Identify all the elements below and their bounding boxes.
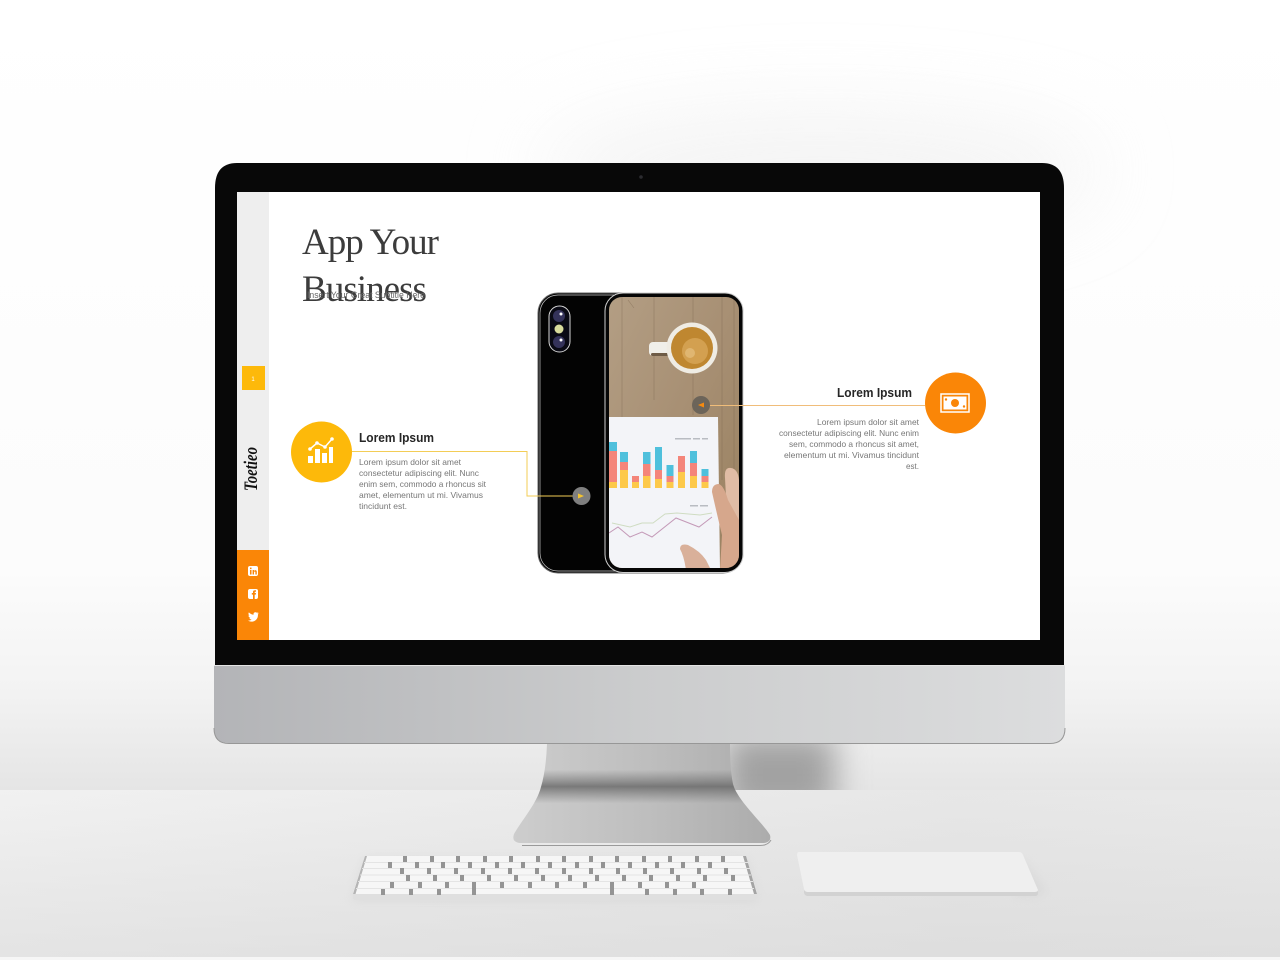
monitor chin	[214, 665, 1065, 744]
phone	[538, 293, 743, 573]
subtitle: Insert Your Great Subtitle Here	[307, 290, 425, 300]
line chart	[609, 513, 712, 537]
body text: enim sem, commodo a rhoncus sit	[359, 479, 487, 489]
brand name: Toetieo	[241, 447, 262, 491]
paper with charts	[609, 417, 720, 570]
page number badge: 1	[251, 377, 255, 383]
connector: left	[352, 452, 575, 496]
body text	[779, 417, 920, 471]
icon: facebook	[248, 589, 258, 599]
phone camera	[549, 306, 570, 352]
phone screen photo	[609, 296, 741, 570]
coffee cup	[649, 322, 718, 374]
monitor camera	[639, 175, 643, 179]
body text	[359, 457, 487, 511]
hand	[680, 468, 739, 570]
trackpad	[797, 852, 1046, 896]
keyboard	[353, 856, 757, 901]
feature: right	[779, 372, 986, 471]
body text: amet, elementum ut mi. Vivamus	[359, 490, 483, 500]
marker: right	[692, 396, 710, 414]
page number badge	[242, 366, 265, 390]
feature: left	[291, 422, 487, 511]
connector: right	[705, 404, 925, 406]
bar chart	[609, 442, 708, 488]
marker: left	[572, 487, 590, 505]
monitor bezel	[215, 163, 1064, 665]
title	[302, 222, 439, 310]
heading: Lorem Ipsum	[837, 386, 912, 400]
title: App Your	[302, 222, 439, 263]
phone front	[605, 293, 743, 572]
slide screen	[237, 192, 1040, 640]
body text: tincidunt est.	[359, 501, 407, 511]
title: Business	[302, 269, 427, 310]
sidebar	[237, 192, 269, 640]
icon: linkedin	[248, 566, 258, 576]
background: desk	[0, 790, 1280, 960]
body text: Lorem ipsum dolor sit amet	[359, 457, 462, 467]
body text: Lorem ipsum dolor sit amet	[817, 417, 920, 427]
body text: elementum ut mi. Vivamus tincidunt	[784, 450, 920, 460]
icon: twitter	[248, 612, 259, 622]
icon: growth chart	[291, 422, 352, 482]
icon: banknote	[925, 372, 986, 434]
body text: est.	[906, 461, 919, 471]
monitor stand	[513, 744, 771, 846]
heading: Lorem Ipsum	[359, 431, 434, 445]
phone back	[538, 293, 743, 573]
body text: consectetur adipiscing elit. Nunc enim	[779, 428, 919, 438]
body text: sem, commodo a rhoncus sit amet,	[789, 439, 919, 449]
body text: consectetur adipiscing elit. Nunc	[359, 468, 480, 478]
